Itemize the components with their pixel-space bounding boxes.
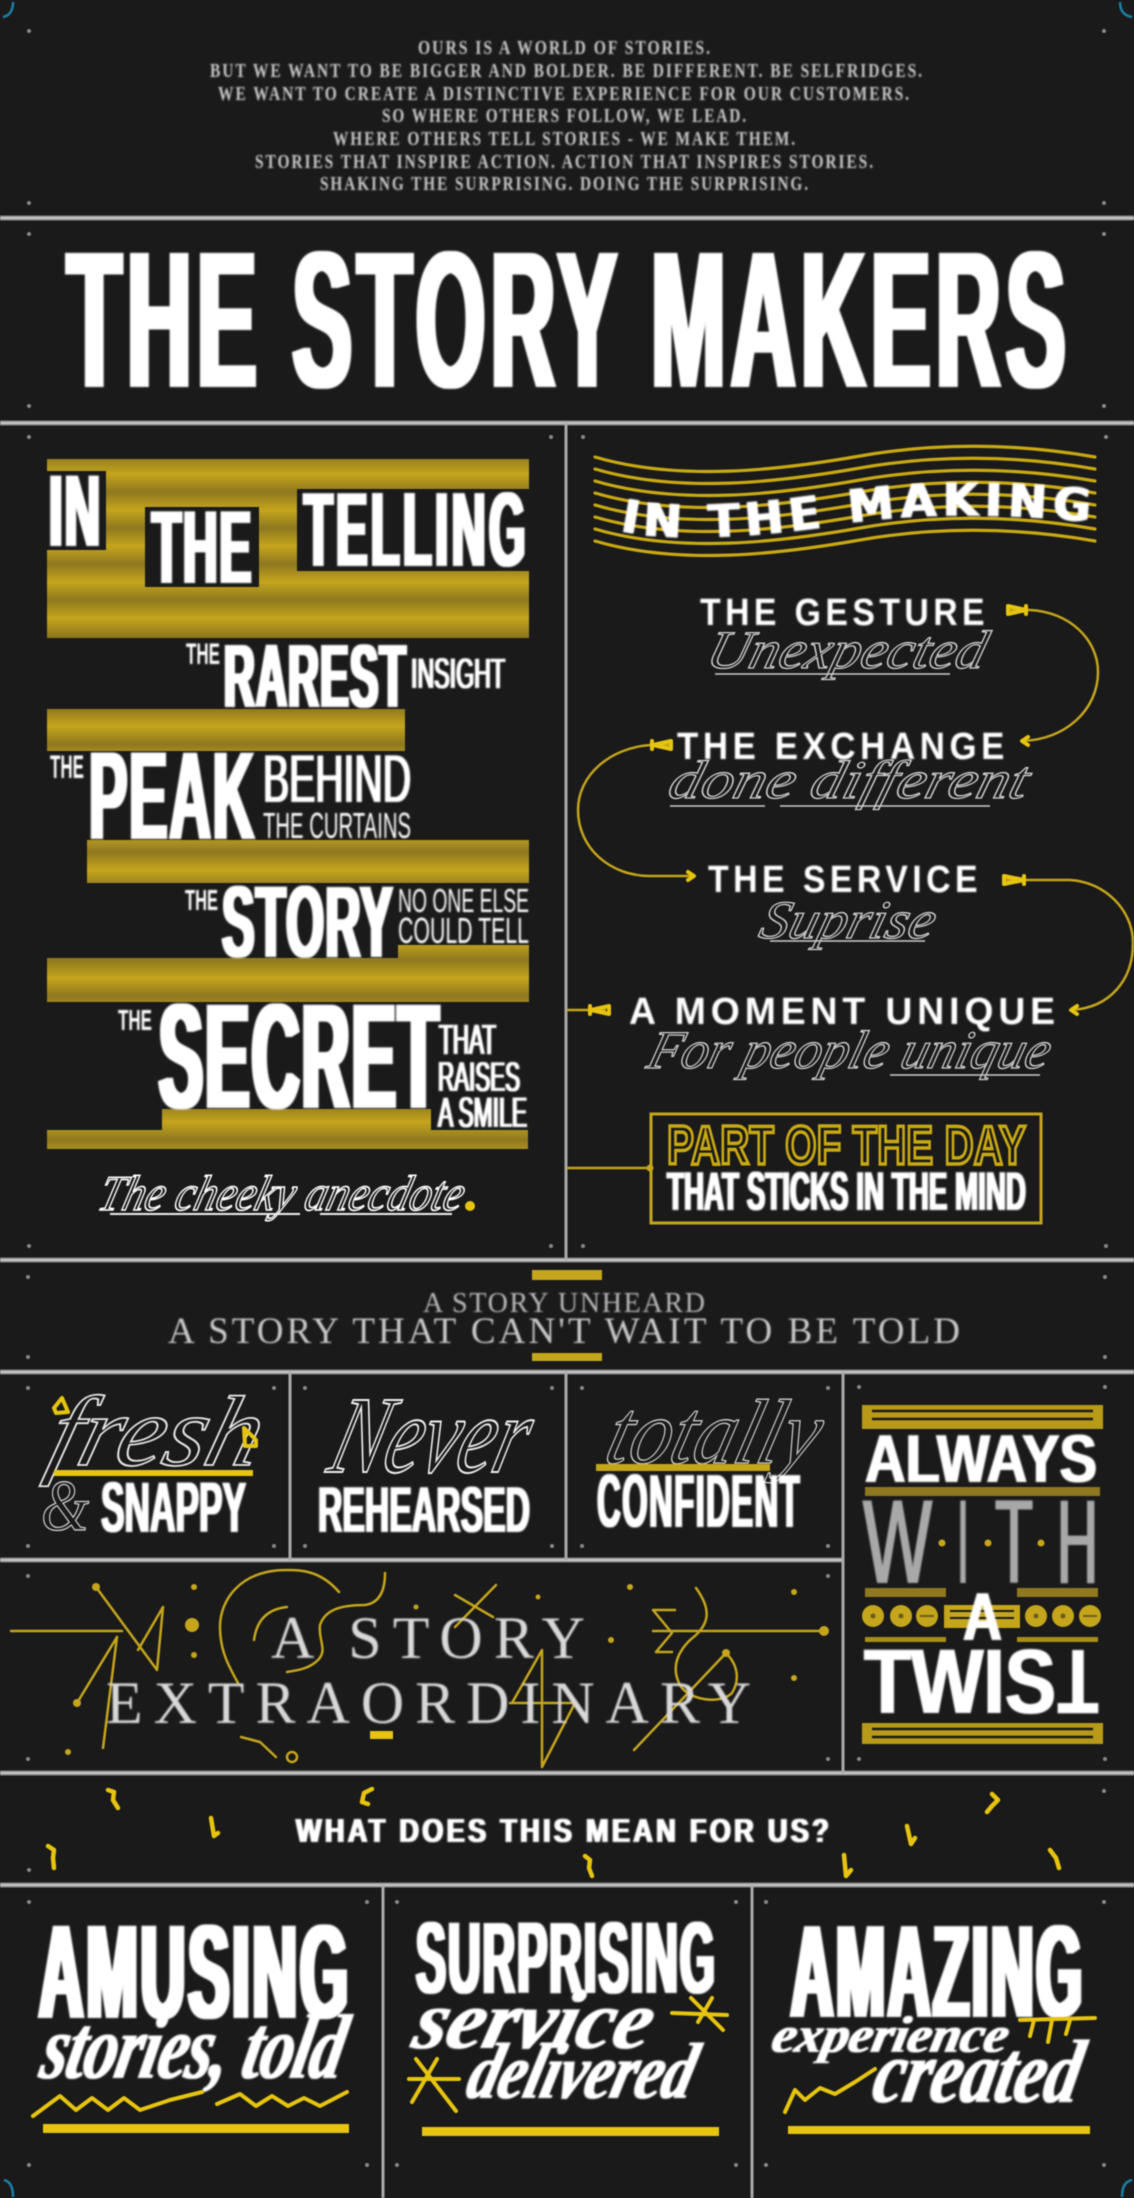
card: never rehearsed: REHEARSED [318, 1473, 530, 1546]
banner: a story unheard [168, 1270, 960, 1361]
banner: a story unheard: A STORY UNHEARD [423, 1288, 705, 1319]
step: a moment unique: For people unique [641, 1020, 1059, 1080]
heading: a story extraordinary [106, 1605, 751, 1736]
card: totally confident: totally [596, 1382, 835, 1484]
step: the exchange: THE EXCHANGE [677, 726, 1009, 768]
arrow: connector to callout [568, 1164, 654, 1172]
line: the peak behind the curtains: THE [50, 749, 84, 785]
striped gold bars [47, 459, 529, 1149]
text: SURPRISING [416, 1901, 717, 2015]
heading: in the telling [49, 454, 529, 606]
heading boxes [47, 471, 529, 587]
card: never rehearsed: Never [318, 1375, 546, 1497]
ornament circles [862, 1605, 1101, 1628]
arrow: service to moment [1004, 876, 1133, 1014]
line: the rarest insight: RAREST [224, 627, 407, 727]
card: amazing experience created [767, 1898, 1095, 2134]
card: surprising service delivered [404, 1901, 727, 2136]
heading: in the telling: THE [152, 490, 253, 606]
step: the gesture: Unexpected [701, 620, 995, 680]
heading: a story extraordinary: A STORY [271, 1605, 585, 1671]
card: fresh and snappy: & [41, 1466, 89, 1546]
line: the peak behind the curtains: THE CURTAINS [263, 805, 411, 846]
arrow: moment to panel edge [568, 1006, 609, 1014]
word: with: T [995, 1475, 1033, 1609]
word: a: A [963, 1579, 1002, 1655]
top ornament band [862, 1405, 1103, 1429]
intro text block: WE WANT TO CREATE A DISTINCTIVE EXPERIENCE FOR OUR CUSTOMERS. [218, 83, 911, 105]
panel: in the telling [47, 454, 529, 1222]
line: the rarest insight: THE [186, 638, 220, 671]
intro text block: SHAKING THE SURPRISING. DOING THE SURPRISING. [320, 173, 810, 195]
line: the secret that raises a smile [118, 972, 527, 1140]
heading: in the making: IN THE MAKING [622, 480, 1090, 539]
intro text block: STORIES THAT INSPIRE ACTION. ACTION THAT INSPIRES STORIES. [255, 151, 875, 173]
word: with [863, 1475, 1098, 1609]
card: amusing stories told: stories, told [33, 1997, 357, 2099]
arrow: exchange to service [578, 741, 694, 880]
card: totally confident: CONFIDENT [597, 1459, 801, 1543]
line: the rarest insight [186, 627, 505, 727]
intro text block: SO WHERE OTHERS FOLLOW, WE LEAD. [382, 105, 748, 127]
word: with: W [863, 1475, 932, 1609]
text: AMUSING [39, 1898, 351, 2047]
question heading with marks [48, 1789, 1059, 1876]
line: the secret that raises a smile: A SMILE [438, 1089, 527, 1137]
callout: part of the day [651, 1114, 1041, 1223]
step: the service [708, 859, 982, 950]
panel: a story extraordinary [11, 1570, 829, 1767]
intro text block: BUT WE WANT TO BE BIGGER AND BOLDER. BE DIFFERENT. BE SELFRIDGES. [210, 60, 924, 82]
word: with: I [958, 1475, 968, 1609]
line: the rarest insight: INSIGHT [411, 650, 505, 698]
banner: a story unheard: A STORY THAT CAN'T WAIT TO BE TOLD [168, 1311, 960, 1352]
gold doodles [11, 1570, 824, 1767]
line: the secret that raises a smile: THE [118, 1005, 152, 1037]
word: twist: T [1058, 1630, 1098, 1732]
card: fresh and snappy [38, 1377, 278, 1548]
card: totally confident [596, 1382, 835, 1543]
card: never rehearsed [318, 1375, 546, 1546]
line: the secret that raises a smile: THAT [439, 1016, 496, 1064]
line: the peak behind the curtains: BEHIND [263, 741, 411, 817]
line: the story no one else could tell: COULD TELL [398, 910, 529, 951]
question heading with marks: WHAT DOES THIS MEAN FOR US? [296, 1812, 832, 1849]
line: the secret that raises a smile: RAISES [438, 1053, 520, 1100]
step: the gesture: THE GESTURE [700, 592, 989, 634]
step: the exchange [663, 726, 1039, 810]
arrow: gesture to exchange [1008, 606, 1098, 745]
line: the story no one else could tell: NO ONE ELSE [398, 882, 529, 919]
panel: in the making [566, 444, 1134, 1226]
card: amusing stories told [33, 1898, 357, 2133]
heading: in the telling: IN [49, 454, 102, 568]
line: the story no one else could tell: THE [185, 885, 218, 917]
step: a moment unique [629, 991, 1060, 1080]
word: twist: TWIS [864, 1631, 1056, 1733]
intro text block: OURS IS A WORLD OF STORIES. [418, 37, 712, 59]
card: fresh and snappy: SNAPPY [101, 1469, 246, 1548]
card: fresh and snappy: fresh [38, 1377, 278, 1488]
line: the peak behind the curtains: PEAK [89, 727, 256, 866]
intro text block [210, 37, 924, 195]
card: amazing experience created: experience [767, 2007, 1015, 2064]
card: surprising service delivered: service [404, 1974, 666, 2067]
step: the exchange: done different [663, 750, 1039, 810]
line: the secret that raises a smile: SECRET [159, 972, 441, 1140]
card: surprising service delivered: delivered [459, 2026, 708, 2116]
intro text block: WHERE OTHERS TELL STORIES - WE MAKE THEM. [333, 128, 797, 150]
text: TELLING [304, 471, 529, 589]
step: the service: THE SERVICE [708, 859, 982, 901]
wavy banner lines [595, 446, 1095, 556]
wave path for heading [620, 516, 1090, 538]
panel: always with a twist [862, 1405, 1103, 1744]
heading: a story extraordinary: EXTRAORDINARY [106, 1670, 751, 1736]
script: the cheeky anecdote: The cheeky anecdote [93, 1167, 472, 1222]
line: the story no one else could tell: STORY [222, 865, 394, 979]
step: the service: Suprise [754, 890, 944, 950]
bottom ornament band [862, 1723, 1103, 1744]
step: a moment unique: A MOMENT UNIQUE [629, 991, 1060, 1033]
step: the gesture [700, 592, 995, 680]
